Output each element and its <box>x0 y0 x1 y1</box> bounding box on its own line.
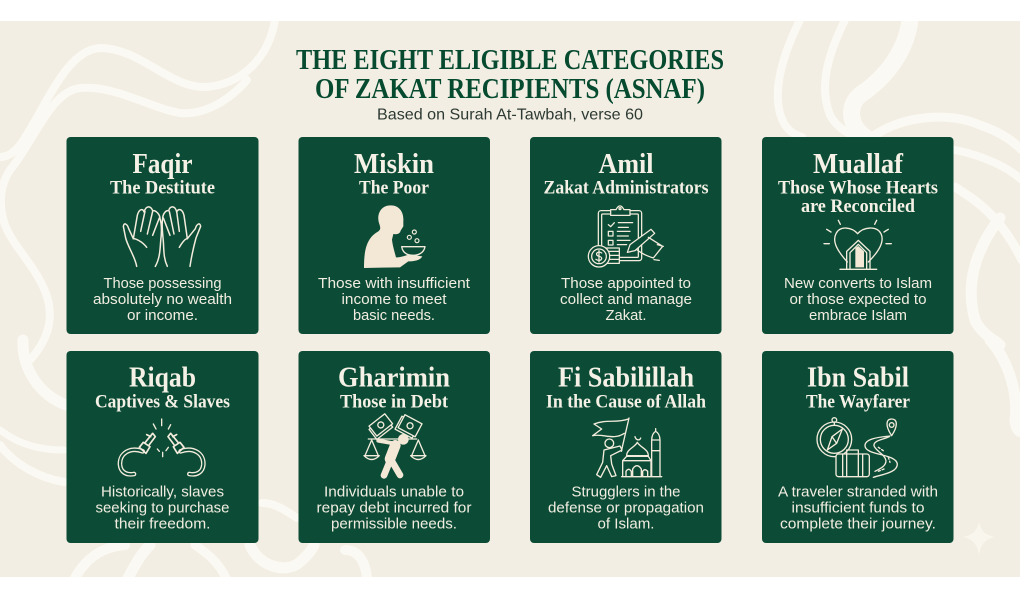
description <box>548 484 704 532</box>
panel: Fi Sabilillah: Fi Sabilillah <box>558 362 694 394</box>
title: THE EIGHT ELIGIBLE CATEGORIES <box>296 44 724 76</box>
description <box>560 275 692 324</box>
description: or those expected to <box>790 291 926 308</box>
description: collect and manage <box>560 291 692 308</box>
description: A traveler stranded with <box>778 484 938 500</box>
description: Historically, slaves <box>101 484 224 500</box>
panel: Faqir <box>66 137 258 334</box>
description: permissible needs. <box>331 516 457 532</box>
panel: Ibn Sabil: Ibn Sabil <box>807 362 909 394</box>
title: OF ZAKAT RECIPIENTS (ASNAF) <box>315 73 705 105</box>
panel: Amil <box>530 137 722 334</box>
description <box>318 275 471 324</box>
panel: Muallaf: Those Whose Hearts <box>778 178 938 198</box>
panel: Muallaf: Muallaf <box>813 149 904 180</box>
description: income to meet <box>342 291 447 308</box>
panel: Miskin: Miskin <box>354 149 434 180</box>
panel: Faqir: The Destitute <box>110 178 215 198</box>
subtitle: Based on Surah At-Tawbah, verse 60 <box>377 106 643 124</box>
description: Strugglers in the <box>572 484 680 500</box>
description: repay debt incurred for <box>316 500 472 516</box>
description: embrace Islam <box>809 307 907 324</box>
icon: broken shackles <box>120 419 203 474</box>
icon: person carrying debt and scales <box>364 414 426 475</box>
panel: Faqir: Faqir <box>132 149 192 180</box>
panel: Gharimin: Those in Debt <box>340 392 449 412</box>
description: defense or propagation <box>548 500 704 516</box>
description: basic needs. <box>353 307 435 324</box>
description: Zakat. <box>606 307 646 324</box>
panel: Riqab: Captives & Slaves <box>95 392 230 412</box>
panel: Ibn Sabil: The Wayfarer <box>806 392 910 412</box>
panel: Amil: Zakat Administrators <box>544 178 708 198</box>
description: Individuals unable to <box>324 484 464 500</box>
title <box>296 44 724 105</box>
panel: Gharimin <box>298 351 490 543</box>
panel: Muallaf: are Reconciled <box>801 197 916 217</box>
description <box>96 484 230 532</box>
icon: open praying hands <box>123 207 201 266</box>
icon: compass, suitcase and road <box>817 418 897 477</box>
icon: person with bowl <box>364 205 425 268</box>
panel: Riqab <box>66 351 258 543</box>
panel: Miskin <box>298 137 490 334</box>
icon: flag bearer and mosque <box>593 418 662 477</box>
description <box>778 484 938 532</box>
panel: Amil: Amil <box>598 149 654 180</box>
description: complete their journey. <box>780 516 936 532</box>
description: absolutely no wealth <box>93 291 232 308</box>
description: Those appointed to <box>561 275 691 292</box>
icon: clipboard, coins and pen <box>588 206 663 267</box>
sparkle <box>963 521 995 555</box>
panel: Fi Sabilillah <box>530 351 722 543</box>
description: New converts to Islam <box>784 275 932 292</box>
description: seeking to purchase <box>96 500 230 516</box>
description <box>93 275 232 324</box>
panel: Ibn Sabil <box>762 351 954 543</box>
description: Those possessing <box>104 275 222 292</box>
description: or income. <box>127 307 198 324</box>
panel: Riqab: Riqab <box>129 362 196 394</box>
panel: Fi Sabilillah: In the Cause of Allah <box>546 392 707 412</box>
panel: Miskin: The Poor <box>359 178 429 198</box>
panel: Muallaf <box>762 137 954 334</box>
description <box>316 484 472 532</box>
description: of Islam. <box>598 516 654 532</box>
description: their freedom. <box>114 516 210 532</box>
icon: heart with doorway <box>824 220 891 269</box>
description: Those with insufficient <box>318 275 471 292</box>
panel: Gharimin: Gharimin <box>338 362 450 394</box>
description <box>784 275 932 324</box>
description: insufficient funds to <box>792 500 924 516</box>
